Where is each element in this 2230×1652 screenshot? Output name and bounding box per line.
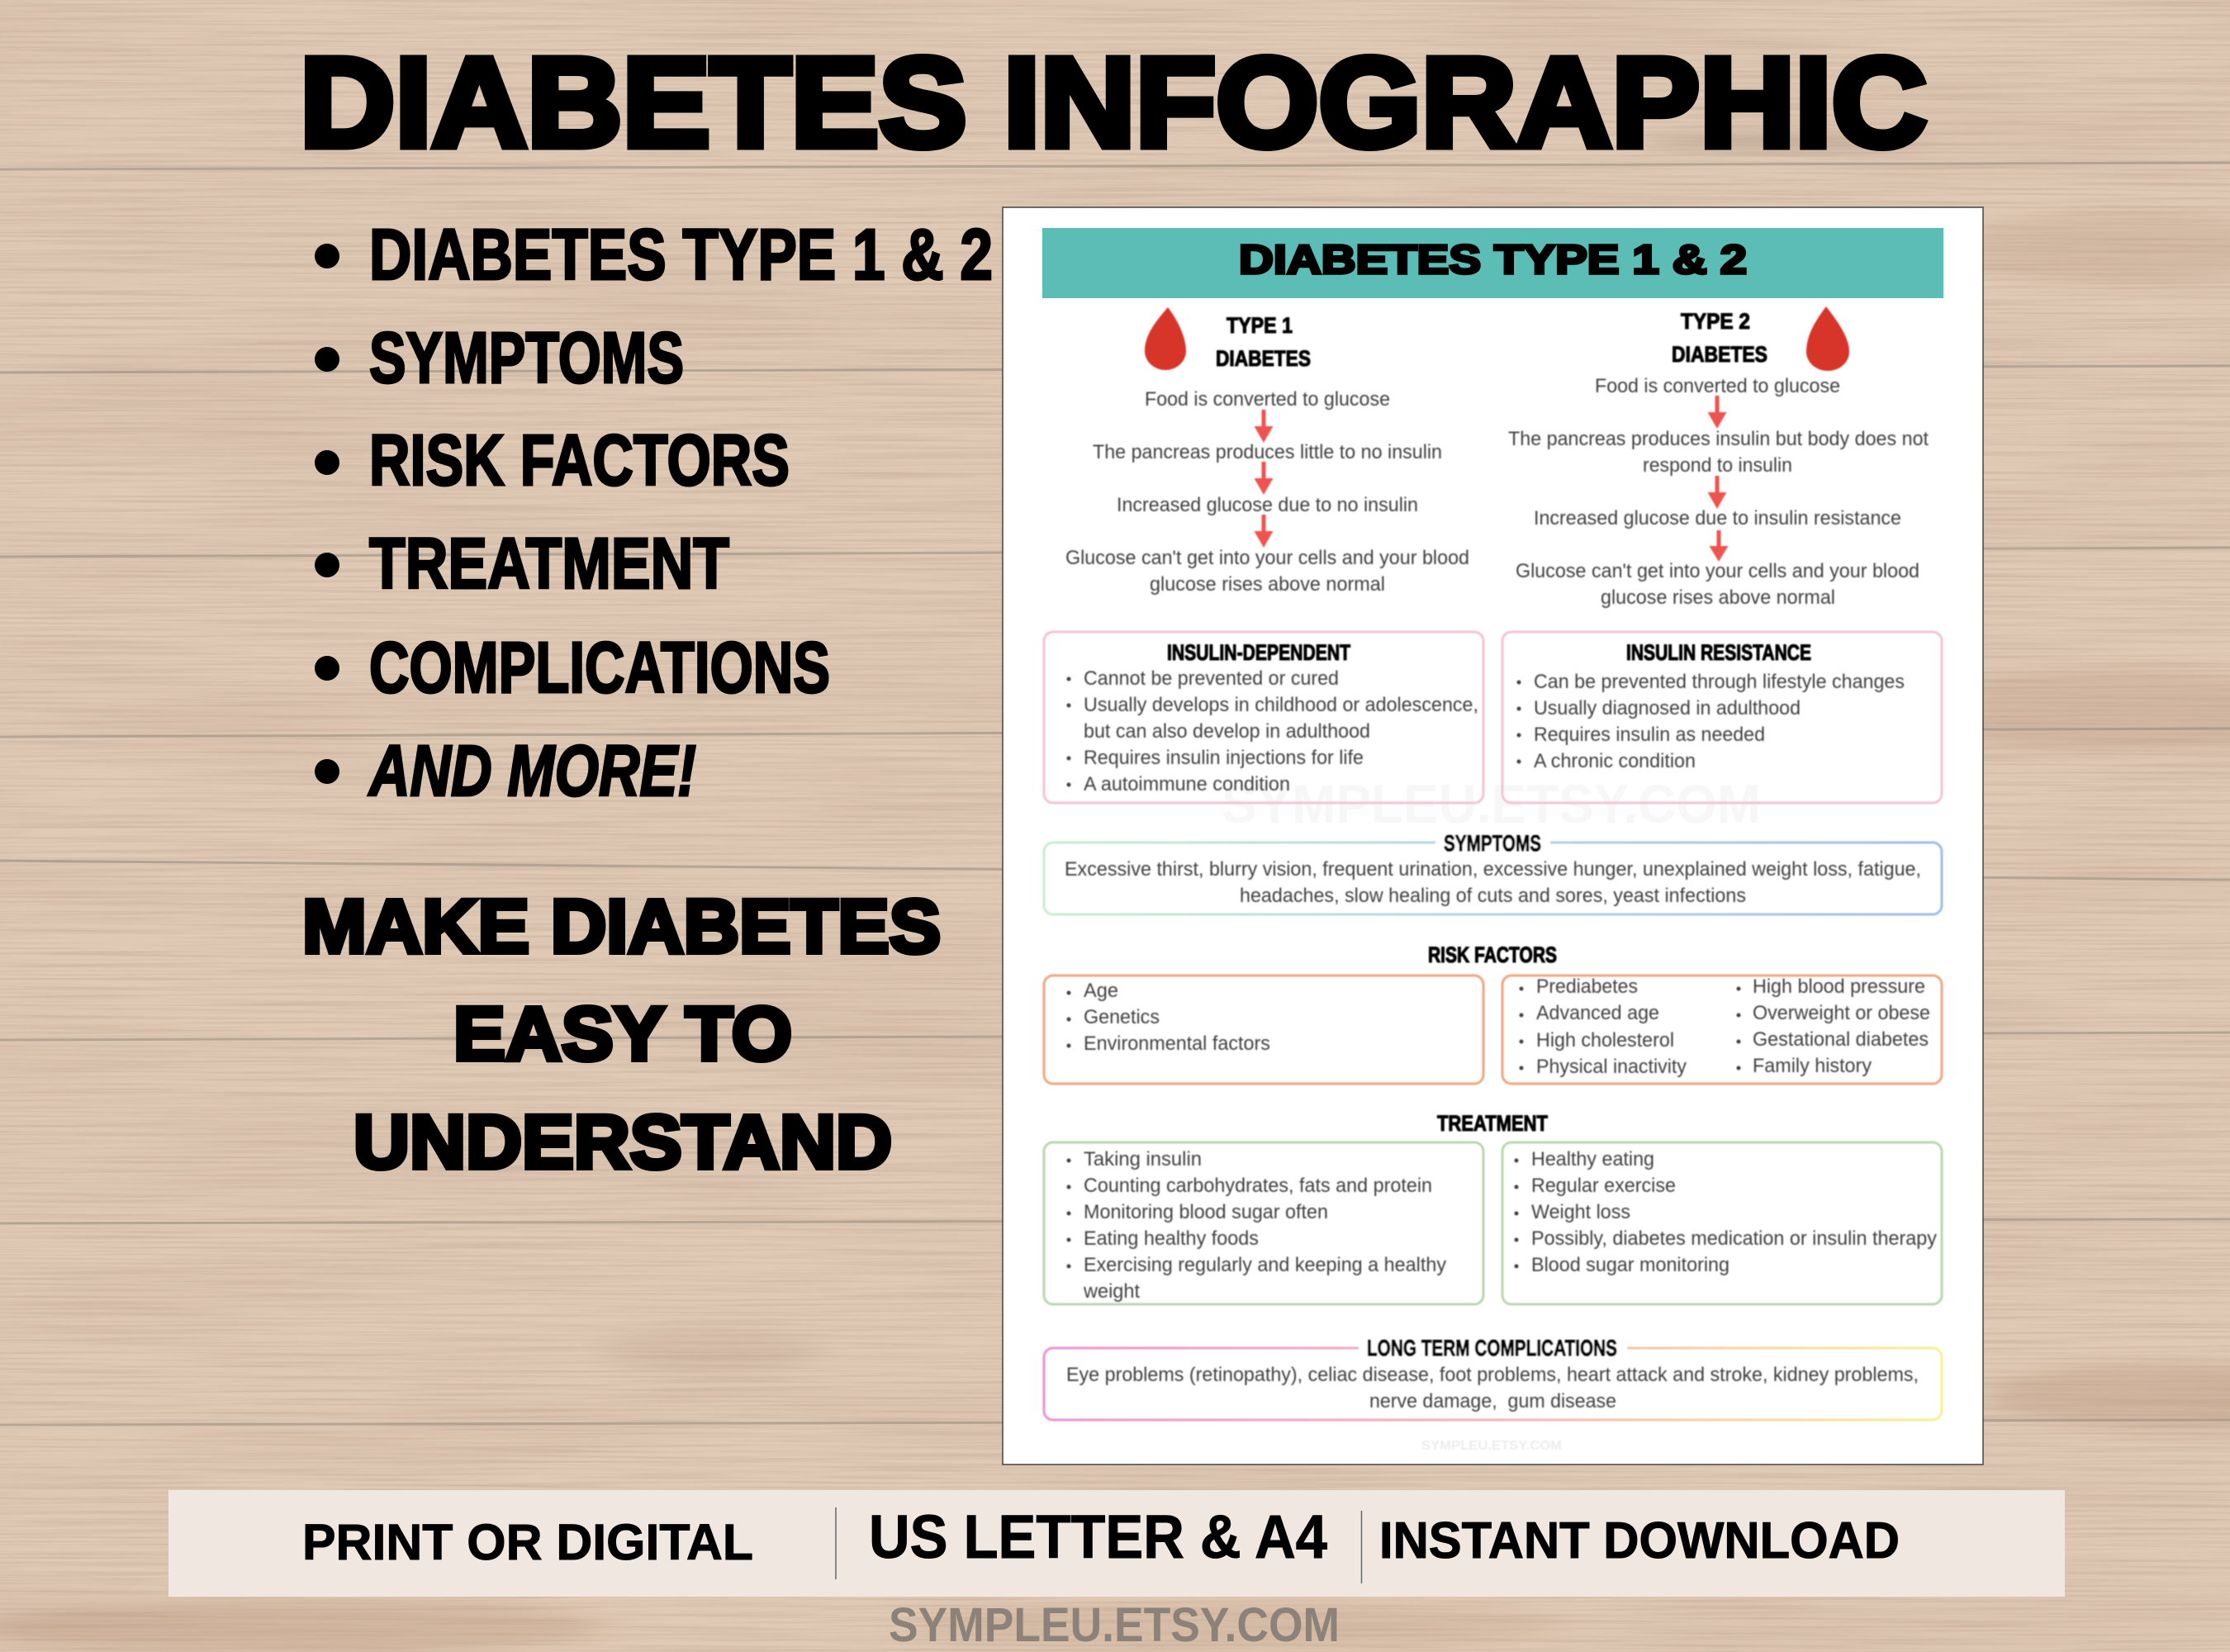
arrow 1 <box>1254 410 1274 443</box>
list item: complications: COMPLICATIONS <box>369 628 830 708</box>
box: risk factors type 2: Physical inactivity <box>1536 1056 1687 1078</box>
flow step text: Food is converted to glucose <box>1595 375 1840 397</box>
flow step text: The pancreas produces little to no insulin <box>1093 441 1442 463</box>
box: insulin resistance: A chronic condition <box>1534 750 1696 772</box>
heading: type 2 diabetes: TYPE 2 <box>1681 309 1750 334</box>
flow step text: Glucose can't get into your cells and your blood <box>1516 560 1919 582</box>
heading: type 2 diabetes: DIABETES <box>1672 342 1767 367</box>
box: insulin resistance <box>1502 632 1942 803</box>
box: risk factors type 1 <box>1044 976 1483 1084</box>
box: risk factors type 2: Overweight or obese <box>1753 1002 1930 1024</box>
footer bar <box>168 1490 2065 1597</box>
title: DIABETES INFOGRAPHIC <box>300 31 1927 173</box>
box: treatment type 1: Taking insulin <box>1084 1148 1202 1170</box>
arrow 2 <box>1708 476 1726 509</box>
list item: and more: AND MORE! <box>368 731 696 811</box>
box: insulin-dependent <box>1044 632 1483 803</box>
box: symptoms: Excessive thirst, blurry vision, frequent urination, excessive hunger, unexplained weight loss, fatigue, <box>1065 858 1921 881</box>
watermark: small: SYMPLEU.ETSY.COM <box>1421 1439 1562 1453</box>
box: insulin-dependent: Requires insulin injections for life <box>1084 747 1364 769</box>
list item: symptoms <box>315 318 684 398</box>
box: risk factors type 1: Genetics <box>1084 1006 1160 1028</box>
box: insulin-dependent: Cannot be prevented or cured <box>1084 667 1339 690</box>
column: type 2 flow <box>1508 306 1929 609</box>
label: us letter & a4: US LETTER & A4 <box>869 1502 1327 1571</box>
box: insulin resistance: Requires insulin as needed <box>1534 724 1765 746</box>
flow step text: glucose rises above normal <box>1150 573 1385 596</box>
box: risk factors type 2: Prediabetes <box>1536 976 1638 998</box>
box: insulin-dependent: but can also develop in adulthood <box>1084 720 1370 743</box>
label: instant download: INSTANT DOWNLOAD <box>1379 1512 1900 1569</box>
list item: treatment: TREATMENT <box>369 524 729 604</box>
box: long term complications <box>1044 1336 1942 1420</box>
flow step text <box>1065 388 1469 596</box>
tagline <box>302 885 941 1184</box>
tagline: UNDERSTAND <box>353 1100 892 1184</box>
box: treatment type 2: Regular exercise <box>1531 1175 1676 1197</box>
box: treatment type 1: Counting carbohydrates, fats and protein <box>1084 1175 1432 1197</box>
box: long term complications: nerve damage, gum disease <box>1369 1390 1616 1412</box>
flow step text: Glucose can't get into your cells and your blood <box>1065 547 1469 569</box>
box: treatment type 1: Eating healthy foods <box>1084 1227 1259 1250</box>
icon: blood drop left <box>1145 307 1186 370</box>
box: risk factors type 2: Advanced age <box>1536 1002 1659 1024</box>
flow step text: Food is converted to glucose <box>1145 388 1390 411</box>
box: symptoms <box>1044 831 1942 914</box>
document preview panel <box>1003 207 1983 1464</box>
box: insulin resistance: Can be prevented through lifestyle changes <box>1534 671 1905 693</box>
box: treatment type 2: Blood sugar monitoring <box>1531 1254 1729 1276</box>
heading: type 2 diabetes <box>1672 309 1767 367</box>
list item: symptoms: SYMPTOMS <box>369 318 684 398</box>
arrow 1 <box>1708 396 1726 429</box>
box: treatment type 2 <box>1502 1142 1942 1304</box>
box: risk factors type 1: Age <box>1084 980 1118 1002</box>
column: type 1 flow <box>1065 307 1469 596</box>
arrow 3 <box>1710 530 1728 562</box>
box: risk factors type 2: High blood pressure <box>1753 976 1925 998</box>
heading: treatment: TREATMENT <box>1437 1111 1548 1136</box>
header band: DIABETES TYPE 1 & 2 <box>1239 238 1747 282</box>
flow step text: glucose rises above normal <box>1601 586 1835 609</box>
box: insulin resistance: Usually diagnosed in adulthood <box>1534 697 1801 719</box>
feature list <box>315 215 993 811</box>
box: long term complications: Eye problems (retinopathy), celiac disease, foot problems, heart attack and stroke, kidney problems, <box>1066 1364 1919 1386</box>
box: insulin-dependent: INSULIN-DEPENDENT <box>1167 640 1350 665</box>
box: treatment type 1: Monitoring blood sugar often <box>1084 1201 1328 1223</box>
box: risk factors type 1: Environmental factors <box>1084 1032 1270 1055</box>
box: treatment type 2: Possibly, diabetes medication or insulin therapy <box>1531 1227 1937 1250</box>
box: long term complications: LONG TERM COMPLICATIONS <box>1367 1336 1617 1360</box>
label: print or digital: PRINT OR DIGITAL <box>302 1514 753 1570</box>
flow step text: Increased glucose due to no insulin <box>1117 494 1418 516</box>
heading: risk factors: RISK FACTORS <box>1428 942 1557 967</box>
arrow 3 <box>1254 515 1274 548</box>
icon: blood drop right <box>1806 306 1849 371</box>
header band <box>1042 228 1943 298</box>
flow step text: The pancreas produces insulin but body does not <box>1508 428 1929 450</box>
flow step text: respond to insulin <box>1643 454 1792 477</box>
box: risk factors type 2 <box>1502 976 1942 1084</box>
arrow 2 <box>1254 462 1274 495</box>
shop url: SYMPLEU.ETSY.COM <box>889 1598 1340 1652</box>
box: insulin-dependent: A autoimmune condition <box>1084 773 1290 795</box>
box: symptoms: headaches, slow healing of cuts and sores, yeast infections <box>1240 885 1746 907</box>
heading: type 1 diabetes: TYPE 1 <box>1226 313 1293 338</box>
watermark: large: SYMPLEU.ETSY.COM <box>1222 773 1761 834</box>
box: insulin resistance: INSULIN RESISTANCE <box>1626 640 1811 665</box>
heading: type 1 diabetes: DIABETES <box>1216 346 1311 371</box>
box: risk factors type 2: Gestational diabetes <box>1753 1028 1929 1051</box>
flow step text: Increased glucose due to insulin resistance <box>1534 507 1901 529</box>
box: treatment type 1: weight <box>1083 1280 1140 1303</box>
box: insulin-dependent: Usually develops in childhood or adolescence, <box>1084 694 1478 716</box>
box: treatment type 1 <box>1044 1142 1483 1304</box>
list item: and more <box>315 731 696 811</box>
box: risk factors type 2: High cholesterol <box>1536 1029 1674 1051</box>
list item: risk factors: RISK FACTORS <box>369 420 790 501</box>
box: treatment type 2: Healthy eating <box>1531 1148 1654 1170</box>
list item: diabetes type 1 & 2: DIABETES TYPE 1 & 2 <box>369 215 993 295</box>
box: treatment type 1: Exercising regularly and keeping a healthy <box>1084 1254 1446 1276</box>
tagline: EASY TO <box>453 992 792 1076</box>
flow step text <box>1508 375 1929 609</box>
box: symptoms: SYMPTOMS <box>1444 831 1541 856</box>
box: treatment type 2: Weight loss <box>1531 1201 1630 1223</box>
heading: type 1 diabetes <box>1216 313 1311 371</box>
tagline: MAKE DIABETES <box>302 885 941 969</box>
box: risk factors type 2: Family history <box>1753 1055 1872 1077</box>
